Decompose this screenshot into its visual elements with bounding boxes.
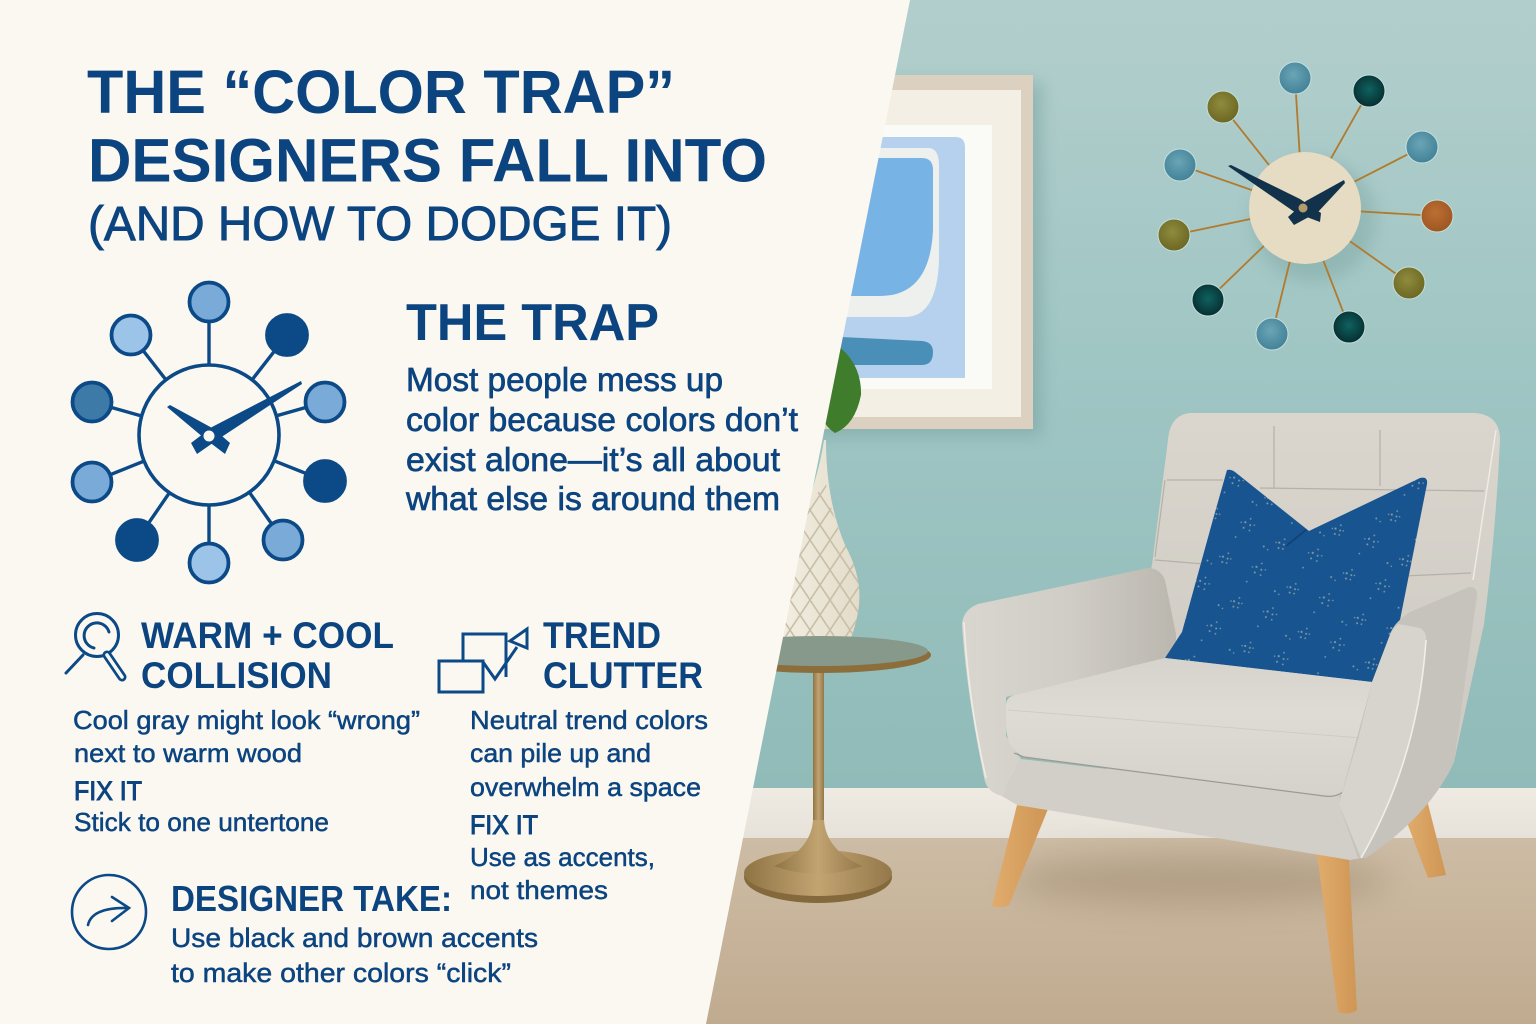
icon: blue ball clock — [72, 282, 345, 582]
designer take — [171, 878, 538, 988]
text block: trend clutter explanation: Use as accents, — [470, 842, 655, 872]
pillow — [1165, 470, 1427, 682]
seat base — [1002, 759, 1361, 860]
designer take: Use black and brown accents — [171, 923, 538, 953]
left arm — [962, 568, 1176, 796]
chair back — [1100, 413, 1500, 858]
text block: trend clutter explanation: can pile up and — [470, 738, 651, 768]
text block: the trap description: color because colors don’t — [406, 401, 798, 438]
title — [87, 58, 767, 251]
heading: the trap: THE TRAP — [406, 294, 659, 352]
icon: magnifier — [66, 614, 122, 677]
text block: warm + cool explanation: FIX IT — [74, 776, 142, 806]
back tufting seams — [1155, 426, 1496, 580]
armchair — [962, 413, 1500, 1014]
seat cushion — [1006, 658, 1372, 796]
heading: warm + cool collision — [141, 615, 394, 696]
icon: overlapping rectangles with arrow — [439, 629, 527, 692]
wall clock photo — [1158, 62, 1453, 350]
heading: trend clutter: TREND — [543, 615, 661, 656]
text block: the trap description — [405, 361, 798, 517]
chair front legs — [992, 805, 1357, 1014]
heading: warm + cool collision: COLLISION — [141, 655, 332, 696]
text block: the trap description: Most people mess up — [406, 361, 723, 398]
text block: trend clutter explanation: overwhelm a space — [470, 772, 701, 802]
text block: warm + cool explanation: Cool gray might look “wrong” — [73, 705, 420, 735]
text block: the trap description: what else is around them — [405, 480, 780, 517]
leaf — [819, 340, 861, 433]
text block: warm + cool explanation — [73, 705, 420, 837]
title: DESIGNERS FALL INTO — [88, 126, 767, 194]
text block: warm + cool explanation: next to warm wood — [74, 738, 302, 768]
floor shadow — [1010, 854, 1390, 906]
text block: trend clutter explanation: FIX IT — [470, 810, 538, 840]
photo background: wall, baseboard, floor — [600, 0, 1536, 1024]
designer take: to make other colors “click” — [171, 958, 511, 988]
right arm — [1339, 587, 1477, 858]
side table — [709, 636, 931, 903]
heading: trend clutter — [543, 615, 703, 696]
framed abstract art — [780, 75, 1042, 436]
text block: the trap description: exist alone—it’s all about — [406, 441, 780, 478]
cream diagonal text panel — [0, 0, 910, 1024]
heading: trend clutter: CLUTTER — [543, 655, 703, 696]
text block: warm + cool explanation: Stick to one untertone — [74, 807, 329, 837]
title: THE “COLOR TRAP” — [87, 58, 675, 126]
text block: trend clutter explanation — [470, 705, 708, 905]
icon: circled arrow — [72, 875, 146, 949]
vase — [780, 440, 859, 652]
chair back leg — [1406, 796, 1446, 878]
text block: trend clutter explanation: Neutral trend colors — [470, 705, 708, 735]
designer take: DESIGNER TAKE: — [171, 878, 452, 919]
text block: trend clutter explanation: not themes — [470, 875, 608, 905]
heading: warm + cool collision: WARM + COOL — [141, 615, 394, 656]
title: (AND HOW TO DODGE IT) — [88, 198, 672, 251]
